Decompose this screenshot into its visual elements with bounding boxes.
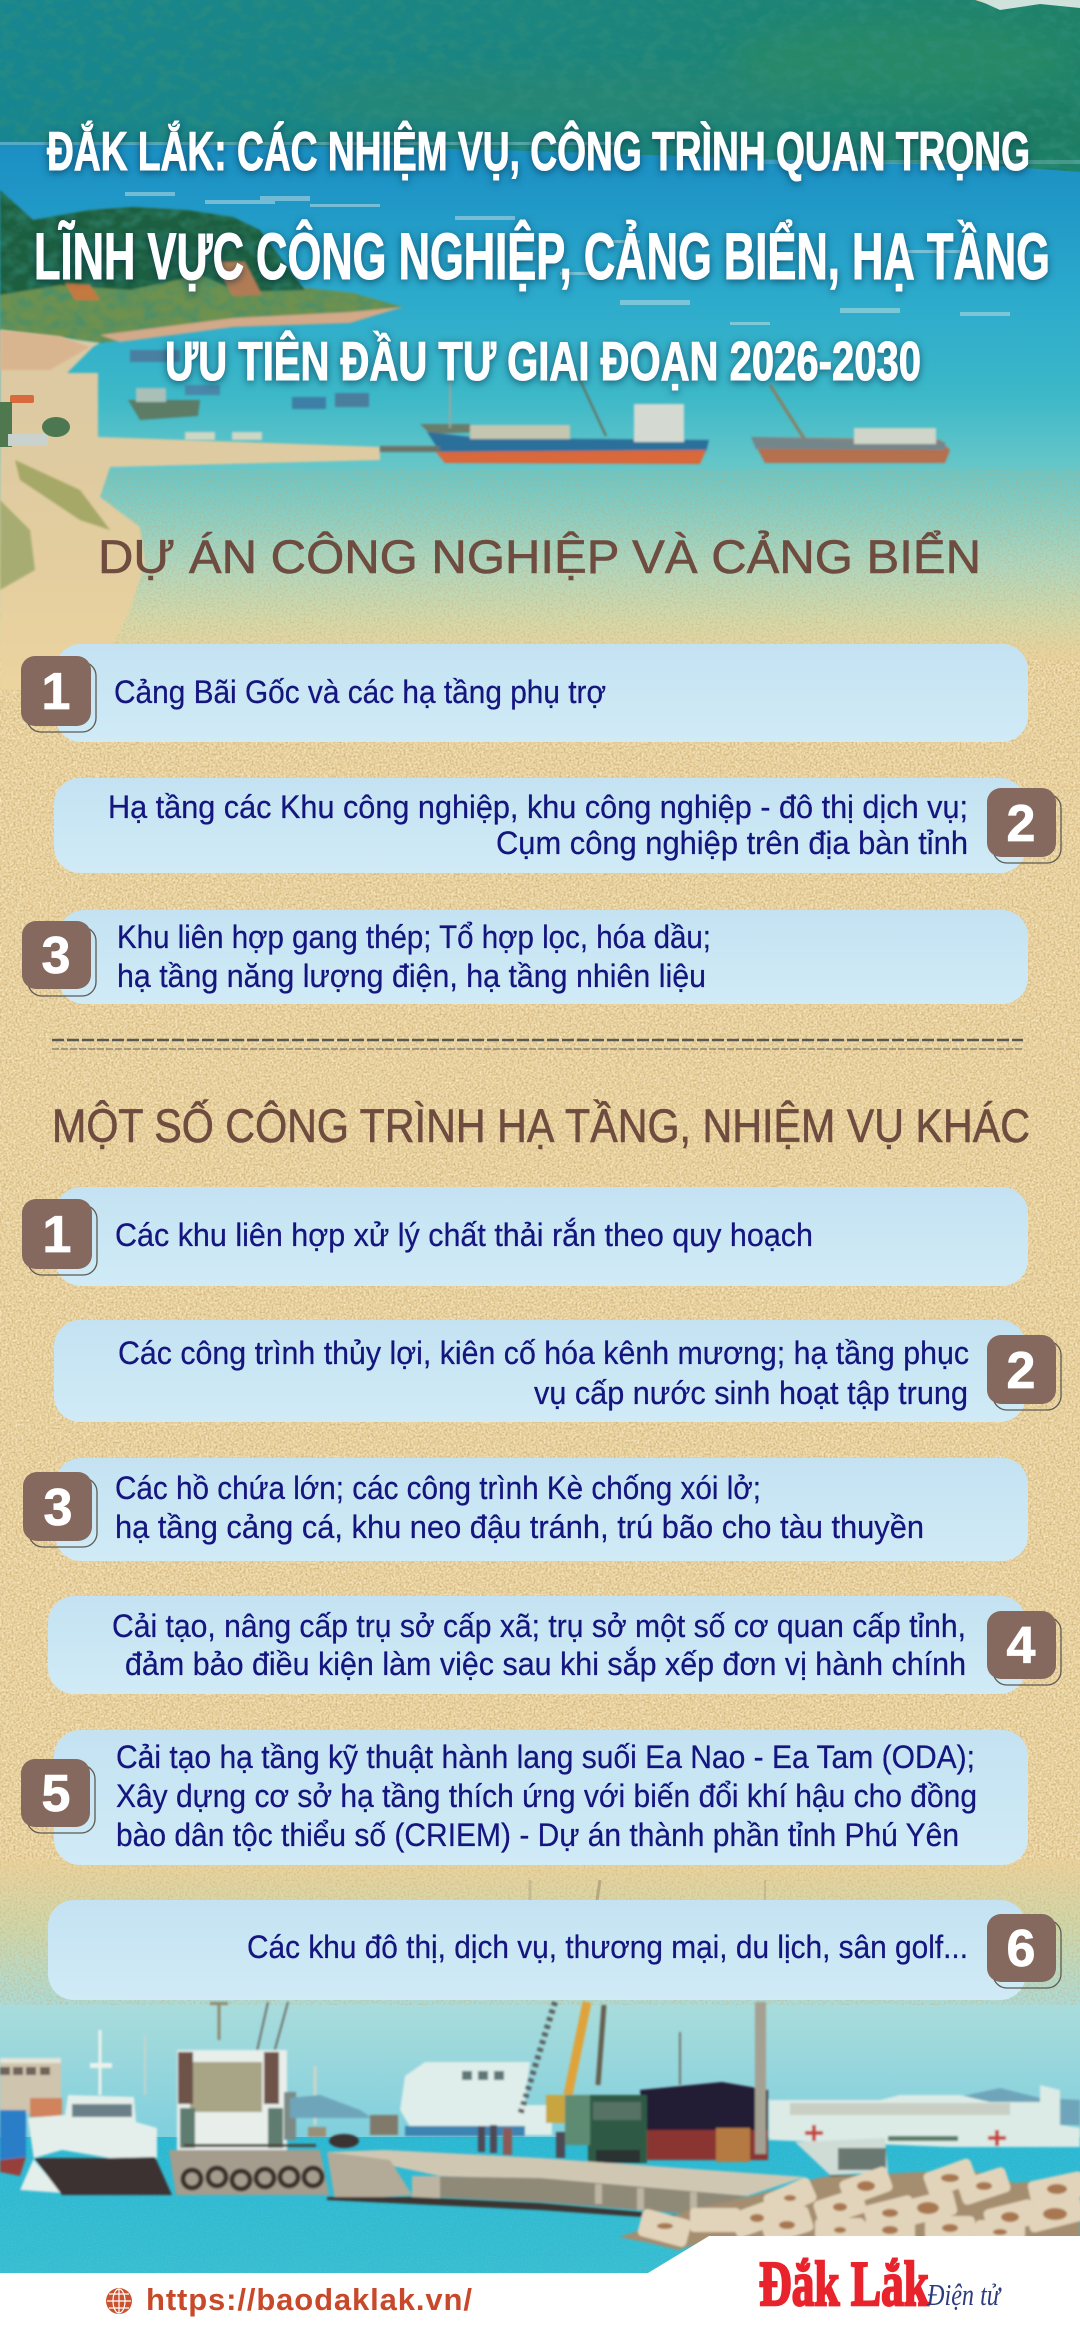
panel: other 5: Xây dựng cơ sở hạ tầng thích ứng với biến đổi khí hậu cho đồng	[116, 1778, 977, 1814]
panel: other 5: Cải tạo hạ tầng kỹ thuật hành lang suối Ea Nao - Ea Tam (ODA);	[116, 1739, 975, 1775]
fish rafts on the bay	[125, 192, 1010, 325]
left building	[0, 2058, 62, 2176]
panel: other 5: bào dân tộc thiểu số (CRIEM) - Dự án thành phần tỉnh Phú Yên	[116, 1817, 959, 1853]
moored cargo ships	[380, 380, 950, 464]
hills	[0, 0, 1080, 172]
panel: industry 1: 1	[42, 663, 70, 721]
panel: other 4: đảm bảo điều kiện làm việc sau khi sắp xếp đơn vị hành chính	[125, 1646, 966, 1682]
bottom photo: port scene	[0, 2002, 1080, 2277]
panel: industry 2	[54, 778, 1061, 873]
workers	[478, 2125, 565, 2158]
distant island at pier	[290, 2095, 372, 2118]
panel: industry 3: Khu liên hợp gang thép; Tổ hợp lọc, hóa dầu;	[117, 919, 711, 955]
panel: other 4: 4	[1007, 1617, 1036, 1675]
panel: other 3: hạ tầng cảng cá, khu neo đậu tránh, trú bão cho tàu thuyền	[115, 1509, 924, 1545]
motorbike	[329, 2134, 359, 2148]
panel: industry 3: 3	[42, 927, 70, 985]
panel: other 6: Các khu đô thị, dịch vụ, thương mại, du lịch, sân golf...	[247, 1929, 968, 1965]
panel: other 1: 1	[43, 1206, 71, 1264]
tug Vũng Rô 01	[169, 2002, 329, 2195]
bottom photo fade into sand	[0, 1860, 1080, 2010]
website url: https://baodaklak.vn/	[146, 2282, 472, 2317]
panel: other 2	[54, 1320, 1061, 1422]
green truck	[565, 2095, 647, 2163]
panel: other 6	[48, 1900, 1061, 2000]
headland	[0, 190, 410, 345]
panel: other 3: 3	[44, 1479, 72, 1537]
panel: industry 2: Cụm công nghiệp trên địa bàn tỉnh	[496, 825, 968, 861]
tetrapods	[619, 2157, 1080, 2250]
top photo: bay with hills and ships	[0, 0, 1080, 690]
concrete pole	[755, 2002, 766, 2154]
panel: other 4	[48, 1596, 1061, 1694]
panel: other 2: Các công trình thủy lợi, kiên cố hóa kênh mương; hạ tầng phục	[118, 1335, 969, 1371]
black barge hull	[640, 2082, 768, 2162]
icon: globe	[106, 2288, 132, 2314]
heading: industry and seaports: DỰ ÁN CÔNG NGHIỆP VÀ CẢNG BIỂN	[98, 530, 981, 583]
title	[34, 120, 1050, 392]
distant hospital ship and mountains	[769, 2085, 1080, 2147]
panel: other 2: vụ cấp nước sinh hoạt tập trung	[534, 1375, 968, 1411]
concrete pier	[327, 2150, 805, 2220]
logo: Đắk Lắk Điện tử: Điện tử	[926, 2277, 1002, 2312]
panel: other 3: Các hồ chứa lớn; các công trình Kè chống xói lở;	[115, 1470, 761, 1506]
panel: other 4: Cải tạo, nâng cấp trụ sở cấp xã; trụ sở một số cơ quan cấp tỉnh,	[112, 1608, 966, 1644]
panel: other 6: 6	[1007, 1920, 1035, 1978]
panel: industry 2: Hạ tầng các Khu công nghiệp, khu công nghiệp - đô thị dịch vụ;	[108, 789, 968, 825]
panel: industry 3	[22, 910, 1028, 1004]
footer white band	[0, 2236, 1080, 2327]
panel: industry 3: hạ tầng năng lượng điện, hạ tầng nhiên liệu	[117, 958, 706, 994]
panel: other 5: 5	[42, 1765, 70, 1823]
panel: other 5	[21, 1730, 1028, 1865]
panel: other 1: Các khu liên hợp xử lý chất thải rắn theo quy hoạch	[115, 1217, 813, 1253]
white boat	[20, 2030, 172, 2195]
light pole	[314, 2066, 316, 2125]
panel: industry 1	[21, 644, 1028, 742]
panel: other 1	[22, 1187, 1028, 1286]
small wooden boat	[795, 2138, 905, 2178]
panel: other 2: 2	[1007, 1342, 1035, 1400]
panel: other 3	[23, 1458, 1028, 1561]
panel: industry 1: Cảng Bãi Gốc và các hạ tầng phụ trợ	[114, 674, 606, 710]
beach, apron and road	[0, 330, 380, 690]
white ship behind pier	[370, 2002, 555, 2136]
small fishing boats	[128, 350, 369, 440]
yellow crane	[546, 2002, 680, 2123]
panel: industry 2: 2	[1007, 795, 1035, 853]
logo: Đắk Lắk Điện tử: Đắk Lắk	[759, 2248, 929, 2319]
